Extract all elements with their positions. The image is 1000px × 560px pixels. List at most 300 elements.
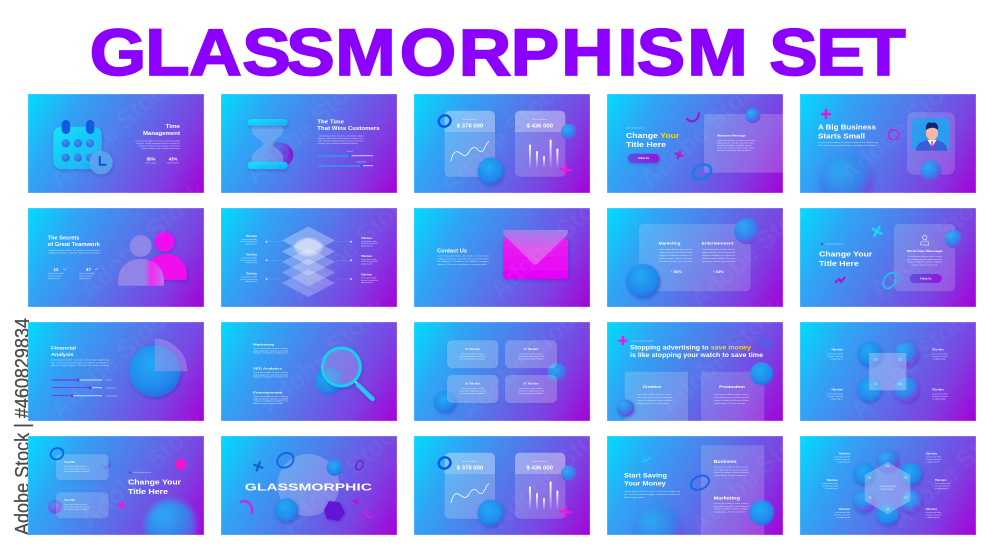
text block: adipiscing elit, sed do eiusmod tempor — [437, 257, 489, 260]
labels: left: Lorem ipsum dolor — [827, 392, 843, 396]
labels: left: sit amet, consectet — [822, 485, 838, 488]
labels: left: Lorem ipsum dolor — [241, 276, 257, 279]
heading: Financial — [51, 346, 76, 352]
labels: left: Title Here — [246, 273, 258, 276]
title text: Starts Small — [818, 134, 865, 140]
slide: financial analysis — [28, 322, 204, 421]
column: marketing: dolore magna aliqua. Ut enim — [659, 257, 692, 260]
labels: right: Title Here — [932, 348, 944, 352]
labels: left: Lorem ipsum dolor — [834, 456, 850, 458]
icon: sphere — [746, 108, 760, 123]
labels: right: Title Here — [926, 508, 938, 511]
panel: balance card left: $ 378 000 — [457, 123, 483, 129]
labels: right: Lorem ipsum dolor — [926, 511, 942, 514]
watermark: Adobe Stock — [239, 60, 378, 189]
text block: incididunt ut labore et dolore magna — [437, 260, 490, 263]
labels: left: Title Here — [831, 388, 844, 392]
watermark: Adobe Stock — [844, 295, 983, 424]
portrait — [912, 118, 950, 151]
heading: Contact Us — [437, 248, 467, 254]
heading: Analysis — [51, 352, 74, 358]
text block: elit, sed do eiusmod tempor incididunt ut labore et — [624, 493, 680, 496]
icon: small plus — [352, 498, 360, 506]
slide: change your title welcome card — [800, 208, 976, 307]
watermark: Adobe Stock — [44, 295, 183, 424]
text block — [437, 254, 490, 266]
panel: business marketing: tetur adipiscing elit, sed do eiusmod — [714, 505, 749, 508]
title text: The Secrets — [48, 236, 80, 242]
labels: left: Lorem ipsum dolor — [834, 511, 850, 514]
labels: right — [926, 452, 951, 519]
stat: 12: sit amet consect — [48, 274, 62, 278]
text block: dolore magna aliqua — [624, 496, 645, 499]
card: top — [56, 454, 108, 480]
stats — [146, 158, 179, 164]
title text — [819, 243, 873, 268]
labels: right: sit amet, consectet — [926, 514, 942, 517]
title text: of Great Teamwork — [48, 242, 100, 248]
icon: ring — [49, 446, 65, 461]
icon: plus — [822, 110, 830, 118]
item: entertainment — [253, 390, 289, 405]
panel: welcome card — [894, 224, 955, 291]
labels: left: Lorem ipsum dolor — [827, 352, 843, 356]
panel: creative — [625, 372, 688, 424]
card 03 — [447, 375, 498, 403]
icon: front person — [118, 235, 164, 286]
card 02 — [505, 340, 557, 368]
labels: left: Title Here — [246, 254, 258, 257]
glass hexagon: 05 — [886, 507, 890, 511]
text block — [907, 249, 943, 266]
icon: calendar — [53, 120, 113, 174]
slider: experience — [318, 160, 373, 167]
title text: Title Here — [626, 140, 666, 149]
labels: left: Title Here — [839, 508, 851, 511]
spheres — [853, 450, 922, 525]
watermark: Adobe Stock — [434, 70, 573, 199]
card 02: 02. Title Here — [524, 348, 539, 351]
labels: right: sit amet, consectet — [932, 355, 948, 358]
card 03: do eiusmod tempor incididunt — [460, 392, 485, 395]
icon: magnifier — [322, 348, 372, 399]
line chart — [451, 141, 489, 161]
labels: right: sit amet consectetur — [361, 260, 378, 263]
button — [628, 154, 659, 163]
text block — [134, 140, 180, 150]
icon: hourglass — [248, 119, 293, 169]
labels: left: ur adipiscing elit — [829, 398, 843, 400]
glass hexagon: 01 — [868, 476, 872, 480]
card 02: consectetur adipiscing elit, sed — [518, 355, 544, 358]
heading — [51, 346, 76, 358]
labels: left: sit amet consectetur — [240, 240, 257, 243]
text block: labore et dolore magna aliqua. Ut enim ad — [139, 144, 181, 148]
stat: 12: Lorem ipsum dolor — [48, 272, 64, 275]
stock id side text: Adobe Stock | #460829834 — [12, 318, 34, 535]
icon: zigzag — [835, 277, 845, 283]
title: GLASSMORPHISM SET — [90, 15, 906, 89]
panel: business marketing: tetur adipiscing elit, sed do eiusmod — [714, 468, 749, 471]
icon: sphere bottom — [274, 498, 298, 522]
panel: balance card left: Account Balance — [463, 460, 477, 463]
item: marketing: Marketing — [253, 342, 274, 346]
text block: Lorem ipsum dolor sit amet, consectetur adipisc — [318, 134, 365, 138]
stat: 12: adipiscing elit — [48, 277, 60, 280]
text block: Lorem ipsum dolor sit amet, consectetur adipiscing — [818, 141, 879, 144]
column: entertainment: dolore magna aliqua. Ut enim — [702, 257, 735, 260]
icon: user — [921, 235, 929, 245]
panel: creative: Lorem ipsum dolor sit amet, consec — [637, 393, 672, 396]
item: seo analytics: tempor incididunt ut labore et — [253, 376, 289, 379]
panel: welcome message: Lorem ipsum dolor sit amet, consectetur — [717, 139, 756, 142]
slide: time management — [28, 94, 204, 193]
labels: left: ur adipiscing elit — [836, 460, 850, 464]
column: entertainment: Lorem ipsum dolor sit amet, consect — [702, 248, 735, 251]
panel: portrait glass — [907, 112, 955, 175]
column: marketing — [659, 242, 693, 274]
column: marketing: ↑ 56% — [670, 269, 682, 274]
text block: ing elit, sed do eiusmod tempor incididunt ut la — [318, 137, 364, 140]
item: entertainment: Lorem ipsum dolor sit amet, consect — [253, 395, 289, 398]
labels: left: sit amet, consectet — [827, 395, 843, 398]
labels: right: Title Here — [935, 479, 947, 482]
panel: balance card left — [445, 111, 495, 177]
labels: left — [827, 348, 844, 400]
watermark: Adobe Stock — [74, 405, 213, 534]
card: bottom: do eiusmod tempor incididunt — [64, 508, 89, 511]
labels: left: adipiscing elit — [246, 261, 257, 264]
column: marketing: Marketing — [659, 242, 680, 246]
labels: left: ur adipiscing elit — [836, 516, 850, 519]
text block — [624, 490, 681, 499]
glass hexagon — [865, 462, 910, 514]
panel: creative: tempor incididunt ut labore et dolore — [637, 399, 673, 402]
card 04: Lorem ipsum dolor sit amet, — [519, 387, 543, 390]
column: marketing: Lorem ipsum dolor sit amet, consect — [659, 248, 692, 251]
column: entertainment: tempor incididunt ut labore et — [702, 254, 735, 257]
heading: The Time — [317, 119, 344, 125]
icon: sphere — [101, 459, 111, 469]
icon: plus blue — [253, 461, 264, 472]
labels: right: Title Here — [926, 452, 938, 455]
labels: right: Title Here — [361, 274, 373, 277]
button: Follow Us — [920, 277, 932, 280]
slide: account balance charts repeat — [414, 436, 590, 535]
slider: brand: Brand — [347, 150, 353, 153]
labels: left: Title Here — [246, 235, 258, 238]
card 04: do eiusmod tempor incididunt — [519, 392, 544, 395]
bar chart — [529, 482, 558, 509]
slide: glassmorphic cover — [221, 436, 397, 535]
title text: Lorem ipsum dolor sit — [626, 126, 645, 129]
icon: plus — [675, 150, 683, 159]
labels: left — [822, 452, 851, 519]
panel: business marketing: magna aliqua. Ut enim ad minim — [714, 474, 745, 477]
labels: left: Lorem ipsum dolor — [241, 238, 257, 241]
panel: creative: tetur adipiscing elit, sed do eiusmod — [637, 396, 673, 399]
labels: right: adipiscing elit — [361, 244, 373, 247]
labels: right — [932, 348, 948, 400]
title text: Lorem ipsum dolor sit amet — [631, 340, 654, 342]
text block: elit, sed do eiusmod tempor incididunt ut labore et — [51, 361, 109, 364]
panel: welcome message: adipiscing elit, sed do eiusmod tempor — [717, 142, 754, 144]
text block: elit, sed do eiusmod tempor incididunt ut labore — [818, 144, 877, 147]
glass square: 03 — [898, 358, 902, 362]
item: seo analytics — [253, 366, 289, 379]
watermark: Adobe Stock — [274, 410, 413, 539]
text block — [818, 142, 878, 146]
text block: Lorem ipsum dolor sit amet, consec — [907, 255, 943, 258]
glass hexagon: 04 — [905, 496, 908, 500]
item: marketing: Lorem ipsum dolor sit amet, consect — [253, 347, 289, 350]
sliders: Conversation — [106, 394, 117, 397]
icon: sphere right — [547, 363, 567, 383]
labels: right: adipiscing elit — [361, 262, 373, 265]
card 01: 01. Title Here — [465, 348, 481, 351]
panel: balance card left: $ 378 000 — [457, 465, 483, 471]
labels: left: Title Here — [827, 479, 839, 482]
icon: small sphere — [561, 466, 577, 482]
panel: business marketing: Business — [714, 459, 737, 464]
panel: balance card right: $ 436 000 — [526, 465, 553, 471]
glass hexagon: 06 — [868, 496, 872, 500]
slide: account balance charts — [414, 94, 590, 193]
column: marketing: tempor incididunt ut labore et — [659, 254, 692, 257]
icon: sphere — [749, 500, 774, 525]
item: seo analytics: adipiscing elit, sed do eiusmod — [253, 373, 288, 376]
icon: ring — [692, 163, 712, 181]
heading: That Wins Customers — [317, 126, 380, 132]
item: seo analytics: SEO Analytics — [253, 366, 282, 370]
labels: left: ur adipiscing elit — [824, 487, 838, 490]
labels: right: Lorem ipsum dolor — [932, 392, 948, 396]
text block: Lorem ipsum dolor sit amet, consectetur — [437, 254, 489, 258]
watermark: Adobe Stock — [254, 290, 393, 419]
slide: magnifier analytics — [221, 322, 397, 421]
glass hexagon: 03 — [905, 476, 908, 480]
icon: small sphere — [561, 124, 577, 140]
title text: Start Saving — [624, 472, 667, 479]
watermark: Adobe Stock — [634, 65, 773, 194]
card 04 — [505, 375, 557, 403]
card 01 — [447, 340, 498, 368]
text block: Lorem ipsum dolor sit amet, consectetur adipis — [135, 140, 181, 142]
slide: start saving your money — [607, 436, 783, 557]
title text — [626, 127, 680, 147]
panel: creative: Creative — [643, 385, 661, 389]
icon: crescent — [365, 507, 373, 517]
panel: balance card right: Account Balance — [533, 460, 547, 463]
text block: Lorem ipsum dolor sit amet, consectetur adipiscing — [51, 358, 110, 362]
stat: 47: adipiscing elit — [79, 277, 91, 280]
slide: contact us — [414, 208, 590, 307]
watermark: Adobe Stock — [484, 175, 623, 304]
icon: sphere — [478, 158, 504, 184]
sliders: Brand — [106, 379, 111, 382]
stat: 47: Lorem ipsum dolor — [79, 272, 95, 275]
slide: your title cards — [28, 436, 204, 552]
stat: 47 — [79, 267, 98, 280]
slider: brand — [318, 150, 373, 157]
card 03: 03. Title Here — [465, 382, 481, 386]
panel: welcome message: Welcome Message — [717, 134, 746, 138]
panel: balance card right — [515, 453, 565, 519]
item: entertainment: dolore magna aliqua ut enim — [253, 402, 284, 405]
icon: polyhedron — [324, 501, 345, 521]
labels: left: ur adipiscing elit — [829, 358, 843, 360]
text block: veniam, quis nostrud exercitation ullamco — [318, 142, 359, 145]
panel: production: magna aliqua. Ut enim ad minim — [714, 402, 746, 405]
button: Follow Us — [638, 157, 650, 160]
sliders — [51, 378, 117, 397]
title text: Change Your — [626, 131, 679, 140]
stats: Dolor sit amet — [167, 162, 179, 164]
card 03: Lorem ipsum dolor sit amet, — [461, 387, 485, 390]
stat: 47: 47 — [86, 267, 91, 272]
icon: sphere — [315, 367, 343, 395]
title text: Title Here — [819, 259, 859, 268]
icon: ring — [689, 473, 711, 493]
stats: Lorem ipsum — [146, 162, 157, 164]
slide: time that wins customers — [221, 94, 397, 193]
card: bottom — [56, 492, 108, 518]
watermark: Adobe Stock — [284, 180, 423, 309]
icon: sphere — [478, 500, 504, 526]
icon: plus — [620, 337, 626, 344]
watermark: Adobe Stock — [74, 175, 213, 304]
glass square: 04 — [898, 382, 902, 386]
panel: business marketing — [701, 445, 764, 537]
panel: welcome message — [704, 114, 789, 173]
title text — [630, 340, 764, 359]
title text — [818, 124, 876, 140]
watermark: Adobe Stock — [654, 290, 793, 419]
column: marketing: ad minim veniam, quis nostrud — [659, 260, 693, 263]
panel: production — [701, 372, 764, 424]
item: marketing — [253, 342, 289, 355]
icon: sphere top — [326, 460, 342, 476]
column: entertainment: Entertainment — [702, 242, 735, 246]
title text: Change Your — [128, 478, 181, 486]
slide: stopping advertising — [607, 322, 783, 424]
stats: 85% — [147, 157, 155, 162]
item: entertainment: tempor incididunt ut labore et — [253, 400, 289, 403]
card 01: do eiusmod tempor incididunt — [460, 358, 485, 360]
icon: hexagon — [176, 458, 186, 470]
icon: plus — [560, 164, 571, 175]
watermark: Adobe Stock — [484, 405, 623, 534]
icon: ring — [437, 455, 453, 471]
panel: balance card right — [515, 111, 565, 177]
pie chart — [129, 339, 187, 397]
text block: dolore magna aliqua. Ut enim ad minim veniam — [51, 364, 109, 367]
icon: plus — [560, 506, 571, 517]
panel: creative: magna aliqua. Ut enim ad minim — [637, 402, 669, 405]
panel: balance card left — [445, 453, 495, 519]
slide: layered infographic — [221, 208, 397, 307]
watermark: Adobe Stock — [834, 60, 973, 189]
item: marketing: adipiscing elit, sed do eiusmod — [253, 349, 288, 352]
panel: production: Lorem ipsum dolor sit amet, consec — [714, 393, 749, 396]
glass square — [869, 353, 906, 390]
text block: bore et dolore magna aliqua. Ut enim ad minim — [318, 140, 364, 142]
column: entertainment: adipiscing elit, sed do eiusmod — [702, 251, 736, 254]
card 03: consectetur adipiscing elit, sed — [460, 390, 485, 392]
text block — [48, 250, 100, 254]
panel: production: tempor incididunt ut labore et dolore — [714, 399, 750, 402]
button — [910, 274, 942, 283]
labels: right: ur adipiscing elit — [932, 358, 946, 360]
labels: right: ur adipiscing elit — [926, 460, 940, 464]
icon: ring purple — [354, 459, 365, 471]
icon: crescent — [761, 339, 772, 344]
card: bottom: Your Title — [64, 499, 75, 502]
panel: business marketing: Lorem ipsum dolor sit amet, consec — [714, 466, 749, 468]
card: top: consectetur adipiscing elit, sed — [64, 468, 90, 470]
labels: right: ur adipiscing elit — [926, 516, 940, 519]
icon: sphere — [920, 160, 942, 182]
item: entertainment: Entertainment — [253, 390, 282, 394]
slide: hexagon infographic — [800, 436, 976, 535]
item: entertainment: adipiscing elit, sed do eiusmod — [253, 397, 288, 400]
watermark: Adobe Stock — [684, 185, 823, 314]
glass hexagon: 02 — [886, 464, 890, 468]
labels: right: sit amet, consectet — [926, 458, 942, 461]
labels: right: ur adipiscing elit — [935, 487, 949, 490]
panel: welcome message: incididunt ut labore et dolore magna — [717, 144, 753, 147]
watermark: Adobe Stock — [44, 65, 183, 194]
card: top: do eiusmod tempor incididunt — [64, 470, 89, 473]
labels: left: sit amet, consectet — [834, 514, 850, 517]
card 01: consectetur adipiscing elit, sed — [460, 355, 485, 358]
card 04: 04. Title Here — [524, 382, 539, 386]
labels: left: sit amet, consectet — [827, 355, 843, 358]
line chart — [451, 483, 489, 503]
glass square: 02 — [874, 358, 878, 362]
heading: Time — [166, 124, 180, 130]
title text: Stopping advertising to save money — [630, 345, 752, 351]
icon: sphere right — [750, 362, 773, 385]
icon: back person — [147, 232, 187, 280]
labels: left: sit amet consectetur — [240, 259, 257, 262]
icon: zigzag — [642, 457, 650, 462]
stat: 12: 12 — [54, 267, 59, 272]
title text: Change Your — [819, 250, 873, 258]
panel: business marketing: magna aliqua. Ut enim ad minim — [714, 510, 745, 513]
labels: right: Lorem ipsum dolor — [361, 277, 377, 280]
icon: ring blue — [275, 450, 296, 471]
icon: sphere top — [734, 218, 760, 244]
slide: marketing entertainment panel — [607, 208, 783, 307]
labels: right: Lorem ipsum dolor — [932, 352, 948, 356]
title text: Lorem ipsum dolor sit — [133, 471, 152, 474]
labels: left: sit amet, consectet — [834, 458, 850, 461]
card 02: Lorem ipsum dolor sit amet, — [519, 352, 543, 356]
glass hexagon: GLASSMORPHISM — [879, 485, 896, 488]
title text — [624, 472, 667, 487]
panel: glass — [639, 224, 751, 291]
text block — [318, 135, 364, 144]
icon: sphere bottom — [626, 264, 660, 298]
heading — [143, 124, 180, 137]
stat: 47: sit amet consect — [79, 274, 93, 278]
labels: left — [240, 235, 281, 283]
labels: right: Lorem ipsum dolor — [926, 456, 942, 458]
labels: left: sit amet consectetur — [240, 278, 257, 281]
icon: sphere left — [48, 500, 62, 514]
panel: welcome message: aliqua. Ut enim ad minim veniam, quis — [717, 146, 755, 150]
